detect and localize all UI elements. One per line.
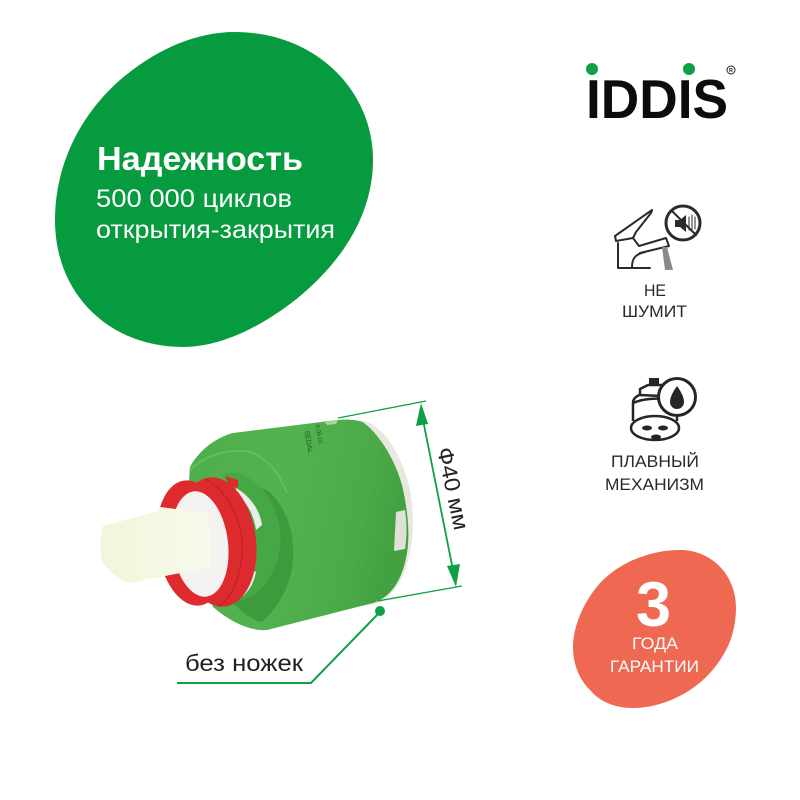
red rear rings: [170, 473, 264, 611]
text: smooth mechanism: МЕХАНИЗМ: [605, 476, 704, 494]
logo: IDDIS: R: [729, 68, 733, 74]
panel: reliability blob: [55, 32, 373, 347]
printed marking: SEDAL: [302, 430, 313, 454]
heading: reliability: Надежность: [97, 140, 303, 177]
collar: [225, 473, 280, 600]
logo: IDDIS: IDDIS: [586, 68, 728, 130]
icon: cartridge with droplet: [631, 378, 696, 440]
ribbed white ring: [236, 488, 262, 596]
text: years warranty: ГАРАНТИИ: [610, 657, 699, 676]
text: no noise: НЕ: [644, 282, 666, 300]
icon: quiet faucet: [615, 206, 700, 270]
number: 3: 3: [636, 570, 671, 640]
recess shadow: [232, 480, 293, 622]
red front ring: [150, 476, 234, 610]
cartridge back rim: [345, 420, 413, 606]
text: years warranty: [610, 634, 699, 676]
white disc: [166, 488, 234, 600]
printed marking: [302, 424, 324, 454]
text: open-close: открытия-закрытия: [96, 216, 335, 244]
text: no noise: [622, 282, 687, 321]
product photo: cartridge: [101, 420, 413, 630]
dimension: diameter 40 mm: [338, 401, 474, 601]
text: cycles: 500 000 циклов: [96, 185, 292, 213]
label: diameter: Ф40 мм: [432, 445, 474, 532]
printed marking: 0.05.01: [314, 424, 323, 446]
cartridge green body: [185, 420, 408, 630]
shaft stem: [101, 507, 211, 583]
text: no noise: ШУМИТ: [622, 303, 687, 321]
text: years warranty: ГОДА: [632, 634, 679, 653]
cartridge notch: [394, 510, 406, 551]
text: smooth mechanism: ПЛАВНЫЙ: [611, 452, 699, 471]
label: no legs: без ножек: [185, 650, 304, 676]
text: smooth mechanism: [605, 452, 704, 494]
callout: no legs: [177, 606, 385, 683]
badge: warranty blob: [573, 550, 736, 708]
